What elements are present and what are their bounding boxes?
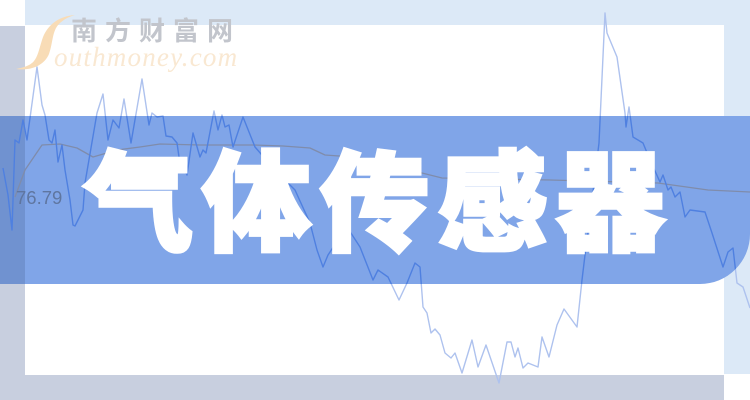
title: 气体传感器 [84,144,674,266]
price line over band [2,116,736,284]
moving average line [15,144,750,197]
watermark domain: outhmoney.com [54,42,238,72]
watermark Chinese name: 南方财富网 [71,16,241,46]
axis value label: 76.79 [16,187,62,208]
watermark: southmoney logo [16,15,241,72]
logo swirl [16,15,75,69]
blue title band [0,116,750,284]
darker left band segment [0,116,25,284]
